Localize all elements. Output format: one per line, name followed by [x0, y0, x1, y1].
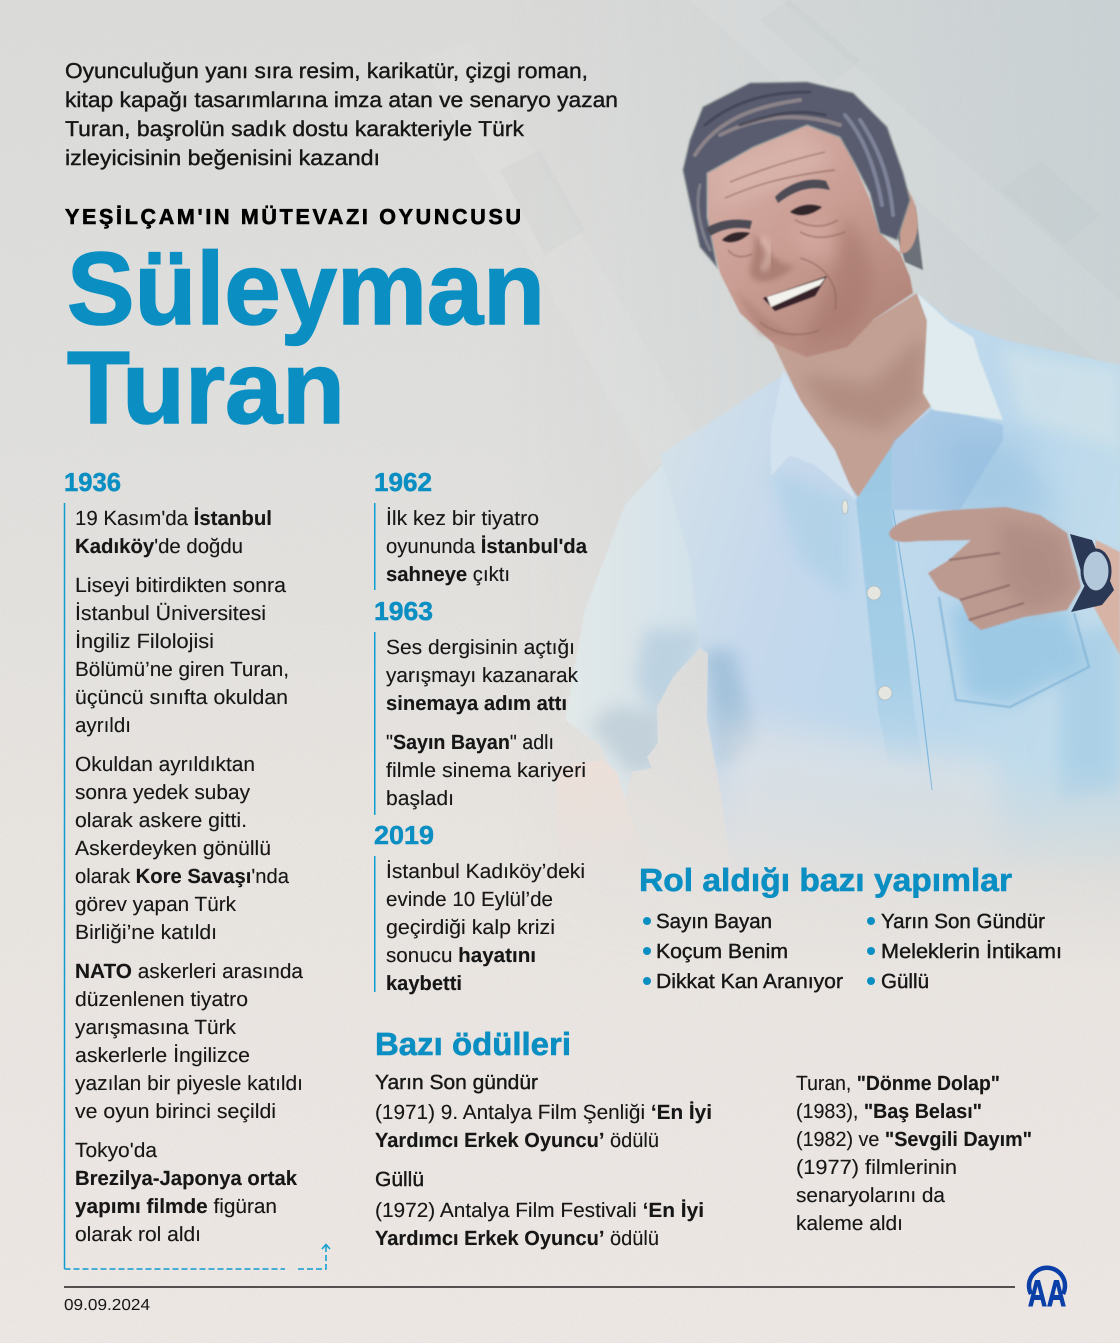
timeline 2019: 2019 [374, 820, 434, 850]
timeline 1936: sonra yedek subay [75, 781, 251, 804]
footer rule [64, 1286, 1015, 1288]
panel: films [639, 862, 1062, 993]
shirt shading [703, 345, 1120, 880]
shirt pocket [939, 597, 1089, 707]
timeline 1963: 1963 [374, 596, 433, 626]
hand [889, 507, 1081, 630]
timeline 1963: filmle sinema kariyeri [386, 759, 586, 782]
screenplay note: Turan, "Dönme Dolap" [796, 1072, 1000, 1095]
panel: films: Sayın Bayan [656, 910, 772, 933]
intro paragraph: Turan, başrolün sadık dostu karakteriyle Türk [65, 117, 524, 141]
panel: awards: Yarın Son gündür [375, 1071, 538, 1094]
timeline 1963: Ses dergisinin açtığı [386, 636, 575, 659]
timeline 1936: NATO askerleri arasında [75, 960, 304, 983]
timeline 1936: İstanbul Üniversitesi [75, 602, 266, 625]
panel: films: Dikkat Kan Aranıyor [656, 970, 843, 993]
timeline 1936: Birliği’ne katıldı [75, 921, 217, 944]
timeline 1962: oyununda İstanbul'da [386, 535, 588, 558]
background paper [0, 0, 1120, 902]
timeline 1936: ayrıldı [75, 714, 131, 737]
timeline 1936: Askerdeyken gönüllü [75, 837, 271, 860]
timeline 1962 [374, 467, 588, 590]
timeline 1936: askerlerle İngilizce [75, 1044, 250, 1067]
face [707, 125, 913, 357]
timeline 1963 [374, 596, 586, 815]
timeline 1936: Tokyo'da [75, 1139, 158, 1162]
timeline 1936: Liseyi bitirdikten sonra [75, 574, 287, 597]
timeline 1936: düzenlenen tiyatro [75, 988, 248, 1011]
timeline 1936: yarışmasına Türk [75, 1016, 237, 1039]
screenplay note: (1977) filmlerinin [796, 1156, 957, 1179]
timeline 1936 [64, 467, 326, 1269]
timeline 1936: İngiliz Filolojisi [75, 630, 214, 653]
timeline 1936: yazılan bir piyesle katıldı [75, 1072, 303, 1095]
panel: films: Rol aldığı bazı yapımlar [639, 862, 1012, 898]
forearm left [556, 760, 623, 802]
shirt and arms [555, 293, 1120, 880]
title name: Süleyman [67, 231, 545, 346]
panel: films: Güllü [881, 970, 929, 993]
intro paragraph: izleyicisinin beğenisini kazandı [65, 146, 380, 170]
timeline 2019: kaybetti [386, 972, 462, 995]
arrow continuation [322, 1244, 330, 1249]
panel: awards: Yardımcı Erkek Oyuncu’ ödülü [375, 1129, 659, 1152]
logo: AA: AA [1028, 1273, 1066, 1314]
timeline 1962: 1962 [374, 467, 432, 497]
panel: films: Meleklerin İntikamı [881, 940, 1062, 963]
title name [67, 231, 545, 445]
panel: awards: (1971) 9. Antalya Film Şenliği ‘En İyi [375, 1101, 712, 1124]
panel: awards: Yardımcı Erkek Oyuncu’ ödülü [375, 1227, 659, 1250]
timeline 1936: olarak askere gitti. [75, 809, 247, 832]
timeline 1936: yapımı filmde figüran [75, 1195, 277, 1218]
logo: AA [1028, 1268, 1066, 1314]
timeline 1936: görev yapan Türk [75, 893, 237, 916]
panel: films: Koçum Benim [656, 940, 788, 963]
left sleeve [566, 465, 700, 796]
smile [763, 276, 827, 311]
timeline 2019: evinde 10 Eylül’de [386, 888, 553, 911]
panel: awards: Güllü [375, 1168, 424, 1191]
timeline 1936: üçüncü sınıfta okuldan [75, 686, 288, 709]
timeline 2019 [374, 820, 585, 995]
panel: awards: (1972) Antalya Film Festivali ‘En İyi [375, 1199, 704, 1222]
hair back [897, 205, 923, 270]
screenplay note: senaryolarını da [796, 1184, 946, 1207]
kicker heading: YEŞİLÇAM'IN MÜTEVAZI OYUNCUSU [65, 205, 521, 229]
timeline 1963: "Sayın Bayan" adlı [386, 731, 554, 754]
timeline 1936: Kadıköy'de doğdu [75, 535, 243, 558]
screenplay note: kaleme aldı [796, 1212, 903, 1235]
hair [683, 82, 910, 267]
ear [900, 183, 918, 253]
timeline 1963: başladı [386, 787, 454, 810]
screenplay note [796, 1072, 1032, 1235]
timeline 1936: olarak rol aldı [75, 1223, 201, 1246]
timeline 1936: Bölümü’ne giren Turan, [75, 658, 289, 681]
torso [660, 293, 1120, 880]
title name: Turan [67, 330, 345, 445]
wristwatch [1070, 534, 1114, 612]
screenplay note: (1982) ve "Sevgili Dayım" [796, 1128, 1032, 1151]
screenplay note: (1983), "Baş Belası" [796, 1100, 982, 1123]
shirt collar [771, 293, 1003, 510]
intro paragraph: kitap kapağı tasarımlarına imza atan ve senaryo yazan [65, 88, 618, 112]
timeline 1936: Brezilya-Japonya ortak [75, 1167, 298, 1190]
timeline 1963: yarışmayı kazanarak [386, 664, 579, 687]
intro paragraph: Oyunculuğun yanı sıra resim, karikatür, çizgi roman, [65, 59, 588, 83]
timeline 1962: İlk kez bir tiyatro [386, 507, 539, 530]
portrait photo [555, 82, 1120, 880]
timeline 1936: ve oyun birinci seçildi [75, 1100, 276, 1123]
nose [750, 232, 795, 282]
timeline 2019: geçirdiği kalp krizi [386, 916, 555, 939]
shirt buttons [842, 500, 892, 700]
eyebrows and eyes [706, 180, 830, 242]
panel: awards: Bazı ödülleri [375, 1026, 571, 1062]
panel: films: Yarın Son Gündür [881, 910, 1045, 933]
shirt placket [856, 446, 918, 749]
timeline 1936: 1936 [64, 467, 121, 497]
timeline 2019: sonucu hayatını [386, 944, 536, 967]
intro paragraph [65, 59, 618, 170]
timeline 1963: sinemaya adım attı [386, 692, 567, 715]
date: 09.09.2024 [64, 1297, 150, 1314]
timeline 1936: 19 Kasım'da İstanbul [75, 507, 272, 530]
right forearm [1090, 540, 1120, 655]
neck [773, 293, 937, 497]
timeline 1962: sahneye çıktı [386, 563, 510, 586]
timeline 2019: İstanbul Kadıköy’deki [386, 860, 585, 883]
panel: awards [375, 1026, 712, 1250]
timeline 1936: olarak Kore Savaşı'nda [75, 865, 290, 888]
timeline 1936: Okuldan ayrıldıktan [75, 753, 255, 776]
